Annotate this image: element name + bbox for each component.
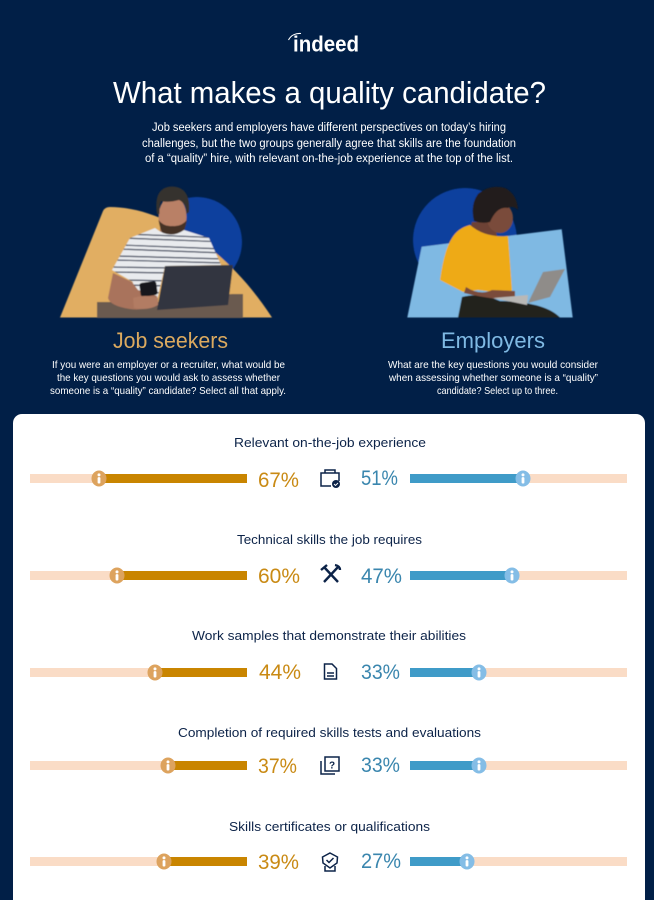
man: striped shirt: [112, 228, 225, 300]
job seekers value: 37%: [258, 755, 297, 778]
employers question: candidate? Select up to three.: [437, 385, 558, 397]
intro paragraph: challenges, but the two groups generally agree that skills are the foundation: [142, 138, 516, 150]
row: technical skills: [30, 532, 627, 588]
intro paragraph: [142, 122, 516, 165]
icon: tools: [321, 565, 340, 582]
man: arm: [108, 273, 158, 309]
shape: light blue backdrop: [407, 229, 573, 318]
intro paragraph: Job seekers and employers have different perspectives on today’s hiring: [152, 122, 506, 134]
man: hand and phone: [133, 281, 158, 309]
row title: Skills certificates or qualifications: [229, 819, 431, 834]
employers marker: [516, 470, 530, 486]
woman: yellow top: [440, 225, 512, 294]
man: neck and head: [156, 186, 189, 241]
job seekers marker: [160, 758, 176, 774]
woman: head and neck: [470, 187, 518, 238]
icon: document: [324, 664, 336, 679]
employers marker: [472, 664, 486, 680]
employers value: 47%: [361, 565, 402, 588]
employers question: [388, 359, 598, 397]
logo: indeed: indeed: [293, 32, 359, 56]
row: work samples: [30, 628, 627, 684]
laptop: [157, 265, 233, 310]
icon: badge: [322, 853, 338, 871]
employers question: What are the key questions you would consider: [388, 359, 598, 371]
job seekers question: If you were an employer or a recruiter, what would be: [52, 359, 285, 371]
shape: tan backdrop: [60, 207, 272, 318]
icon: question cards: ?: [329, 760, 335, 772]
employers question: when assessing whether someone is a “quality”: [388, 372, 598, 384]
shape: blue circle: [152, 197, 242, 287]
row: certificates: [30, 819, 627, 874]
employers value: 33%: [361, 754, 400, 777]
row: skills tests: [30, 725, 627, 778]
job seekers value: 39%: [258, 851, 299, 874]
employers marker: [472, 758, 486, 774]
woman: skirt: [458, 295, 560, 318]
job seekers marker: [110, 568, 124, 584]
row title: Completion of required skills tests and evaluations: [178, 725, 482, 740]
job seekers question: someone is a “quality” candidate? Select all that apply.: [50, 385, 286, 397]
row title: Technical skills the job requires: [237, 532, 423, 547]
job seekers value: 67%: [258, 469, 299, 492]
employers value: 51%: [361, 467, 398, 490]
shape: blue circle: [413, 188, 517, 292]
illustration: job seeker at laptop: [60, 186, 272, 318]
job seekers question: [50, 359, 286, 397]
employers value: 33%: [361, 661, 400, 684]
woman: arm: [464, 287, 515, 300]
employers marker: [504, 568, 520, 584]
heading: Employers: Employers: [441, 328, 545, 353]
job seekers question: the key questions you would ask to assess whether: [57, 372, 280, 384]
row: relevant experience: [30, 435, 627, 492]
job seekers marker: [148, 664, 162, 680]
job seekers value: 44%: [259, 661, 301, 684]
intro paragraph: of a “quality” hire, with relevant on-the-job experience at the top of the list.: [145, 153, 513, 165]
icon: question cards: [321, 757, 339, 774]
job seekers marker: [92, 470, 106, 486]
icon: briefcase: [321, 470, 340, 488]
row title: Work samples that demonstrate their abilities: [192, 628, 467, 643]
table: [97, 294, 243, 318]
laptop: [493, 269, 565, 305]
job seekers marker: [156, 854, 172, 870]
job seekers value: 60%: [258, 565, 300, 588]
employers value: 27%: [361, 850, 401, 873]
panel: results: [13, 414, 645, 900]
title: What makes a quality candidate?: [113, 75, 546, 110]
heading: Job seekers: Job seekers: [113, 328, 228, 353]
employers marker: [460, 854, 474, 870]
illustration: employer with laptop: [407, 187, 573, 318]
row title: Relevant on-the-job experience: [234, 435, 426, 450]
